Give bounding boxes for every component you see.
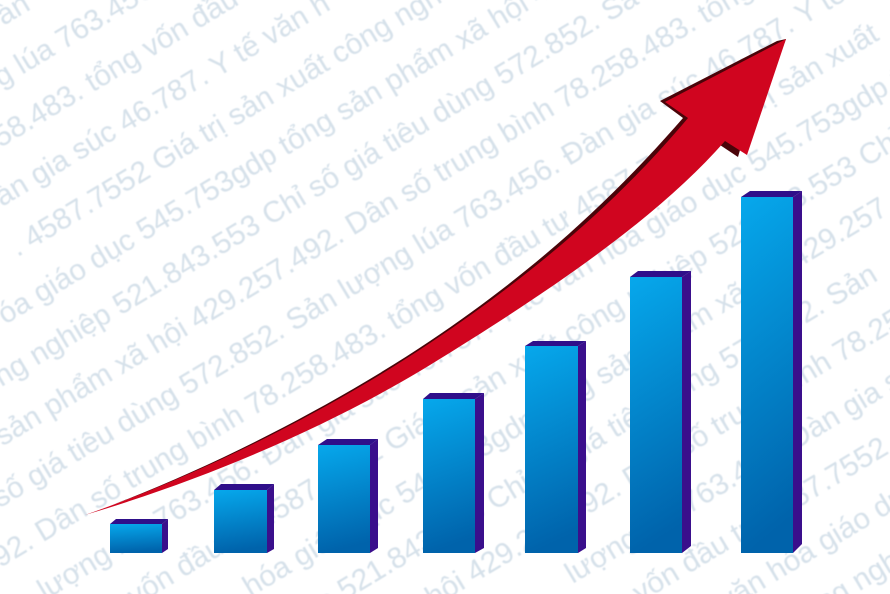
bar 5 — [525, 341, 586, 553]
bar 3 — [318, 439, 378, 553]
bar 2 — [214, 484, 274, 553]
background watermark text: hóa giáo dục 545.753gdp tổng sản phẩm xã hội 429.257 — [237, 191, 890, 594]
background watermark text: 92. Dân số trung bình 78.258.483. tổng vốn đầu tư 4587.7552 Giá trị sản xuất — [0, 16, 885, 574]
rising red arrow — [85, 39, 786, 515]
bar 1 — [110, 519, 168, 553]
bar 7 — [741, 191, 802, 553]
bar 4 — [423, 393, 484, 553]
bar 6 — [630, 271, 691, 553]
